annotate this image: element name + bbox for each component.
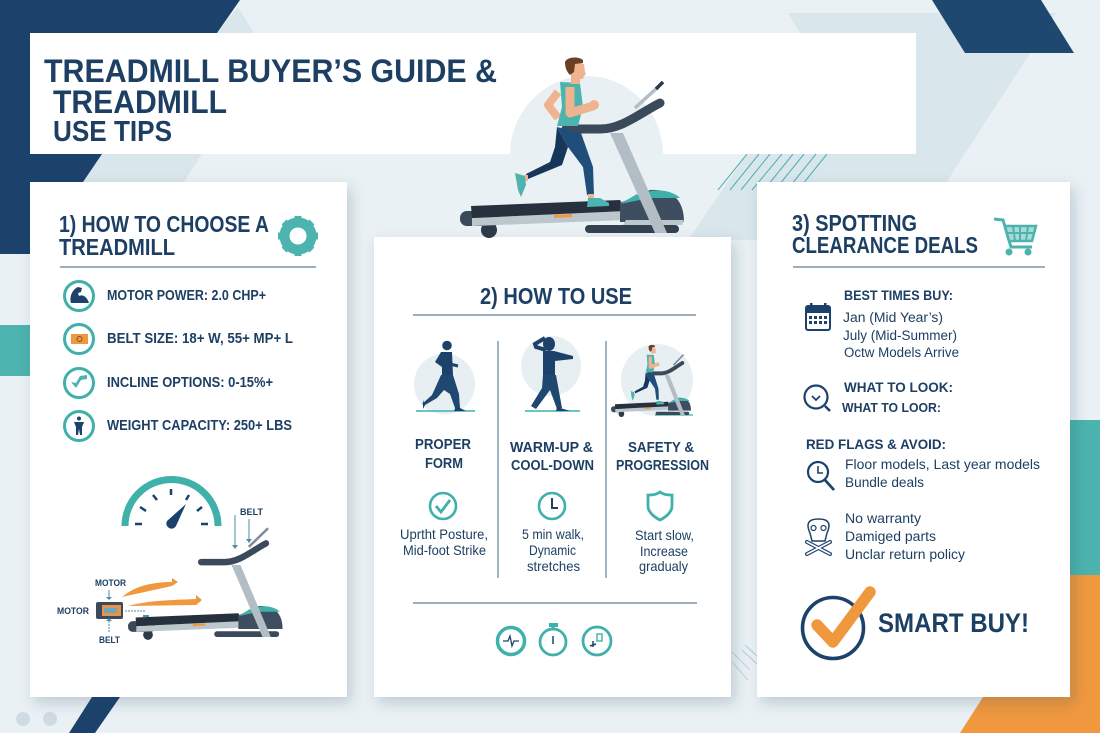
panel: how to use: [374, 237, 731, 697]
text: warm-up tips: 5 min walk,: [522, 526, 584, 542]
label: warm-up and cool-down: COOL-DOWN: [511, 458, 594, 474]
spec: belt size: BELT SIZE: 18+ W, 55+ MP+ L: [107, 330, 293, 347]
label: safety and progression: SAFETY &: [628, 440, 694, 456]
motor component: [96, 602, 123, 619]
icon: shield: [648, 492, 672, 520]
text: floor models: Floor models, Last year models: [845, 456, 1040, 472]
text: what to look: WHAT TO LOOR:: [842, 400, 941, 415]
text: form tips: Mid-foot Strike: [403, 542, 486, 558]
label: safety and progression: PROGRESSION: [616, 458, 709, 474]
title text: TREADMILL: [53, 84, 227, 120]
text: what to look: WHAT TO LOOK:: [844, 379, 953, 395]
title text: TREADMILL BUYER’S GUIDE &: [44, 53, 497, 89]
arrow: upper orange: [122, 578, 178, 597]
icon: device: [583, 627, 611, 655]
spec: weight capacity: WEIGHT CAPACITY: 250+ LBS: [107, 417, 292, 434]
text: form tips: [400, 526, 488, 558]
spec: incline options: [64, 368, 273, 398]
heading: how to choose a treadmill: [59, 211, 269, 260]
icon: heart rate: [498, 628, 524, 654]
text: warm-up tips: stretches: [527, 558, 580, 574]
text: best times to buy: [843, 288, 959, 360]
spec: weight capacity: [64, 412, 292, 440]
panel: spotting clearance deals: [757, 182, 1070, 697]
icon: smart buy check: [802, 592, 870, 658]
icon: skull and crossbones: [807, 519, 830, 554]
text: warm-up tips: [522, 526, 584, 574]
text: best times to buy: July (Mid-Summer): [843, 328, 957, 343]
label: proper form: [415, 437, 471, 472]
text: floor models: [845, 456, 1040, 490]
icon: gear: [278, 216, 318, 256]
text: best times to buy: BEST TIMES BUY:: [844, 288, 953, 303]
arch backdrop: [510, 76, 663, 155]
illustration: warm-up stretch figure: [521, 336, 581, 411]
diagram labels and pointers: [57, 507, 263, 646]
text: warnings: No warranty: [845, 510, 921, 526]
text: warnings: Damiged parts: [845, 528, 936, 544]
heading: how to choose a treadmill: TREADMILL: [59, 234, 175, 260]
heading: how to choose a treadmill: 1) HOW TO CHOOSE A: [59, 211, 269, 237]
spec: belt size: [64, 324, 293, 354]
icon: check circle: [430, 493, 456, 519]
illustration: proper form runner: [414, 341, 475, 414]
title text: [44, 53, 497, 148]
label: safety and progression: [616, 440, 709, 474]
label: proper form: PROPER: [415, 437, 471, 453]
diagram labels and pointers: MOTOR: [95, 578, 126, 589]
text: form tips: Uprtht Posture,: [400, 526, 488, 542]
runner: [515, 58, 609, 207]
icon: stopwatch: [540, 623, 566, 655]
heading: spotting clearance deals: [792, 210, 978, 258]
spec: incline options: INCLINE OPTIONS: 0-15%+: [107, 374, 273, 391]
heading: how to use: 2) HOW TO USE: [480, 283, 632, 309]
diagram labels and pointers: BELT: [99, 635, 120, 646]
text: safety tips: Increase: [640, 543, 688, 559]
spec: motor power: [64, 282, 266, 310]
icon: magnifier clock: [808, 462, 834, 490]
diagram labels and pointers: BELT: [240, 507, 263, 518]
icon: clock: [539, 493, 565, 519]
gauge: [125, 480, 218, 529]
spec: motor power: MOTOR POWER: 2.0 CHP+: [107, 287, 266, 304]
text: red flags heading: RED FLAGS & AVOID:: [806, 436, 946, 452]
illustration: runner on treadmill: [611, 344, 693, 417]
text: safety tips: gradualy: [639, 558, 688, 574]
label: warm-up and cool-down: [510, 440, 594, 474]
label: warm-up and cool-down: WARM-UP &: [510, 440, 594, 456]
title text: USE TIPS: [53, 116, 172, 148]
heading: spotting clearance deals: CLEARANCE DEALS: [792, 232, 978, 258]
title banner: [30, 33, 916, 154]
icon: calendar: [806, 303, 830, 330]
text: safety tips: Start slow,: [635, 527, 694, 543]
text: safety tips: [635, 527, 694, 574]
panel: how to choose: [30, 182, 347, 697]
icon: magnifier check: [804, 386, 830, 411]
text: floor models: Bundle deals: [845, 474, 924, 490]
label: proper form: FORM: [425, 456, 463, 472]
treadmill: [460, 82, 684, 238]
text: best times to buy: Octw Models Arrive: [844, 345, 959, 360]
text: best times to buy: Jan (Mid Year’s): [843, 310, 943, 325]
heading: spotting clearance deals: 3) SPOTTING: [792, 210, 917, 236]
diagram labels and pointers: MOTOR: [57, 606, 89, 617]
text: smart buy: SMART BUY!: [878, 608, 1029, 638]
text: warnings: Unclar return policy: [845, 546, 965, 562]
arrow: lower orange: [128, 595, 202, 606]
diagram: small treadmill: [128, 528, 283, 640]
illustration: runner on treadmill: [460, 58, 684, 238]
text: what to look: [842, 379, 953, 415]
text: warnings: [845, 510, 965, 562]
text: warm-up tips: Dynamic: [529, 542, 576, 558]
icon: shopping cart: [994, 219, 1036, 255]
